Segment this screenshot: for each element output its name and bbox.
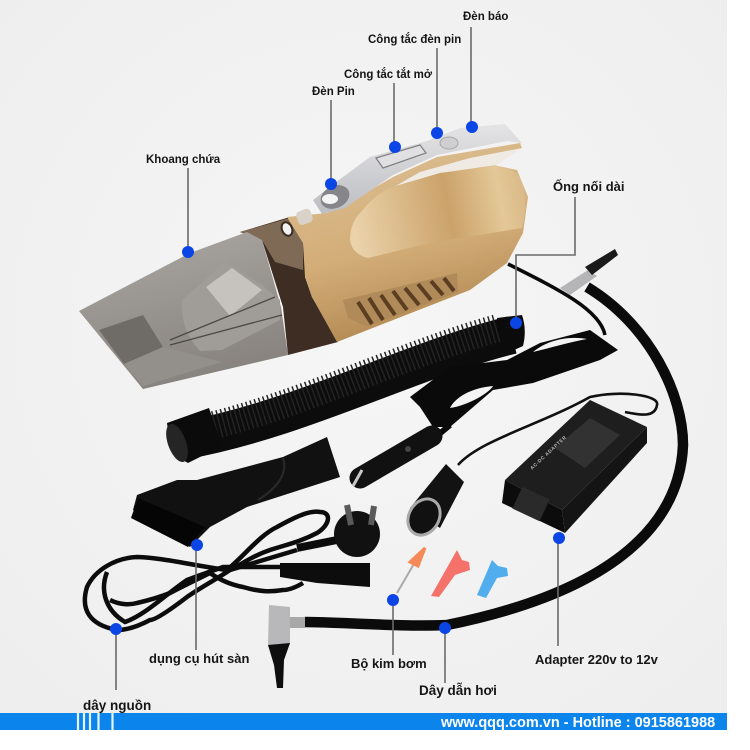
side panel (350, 166, 526, 258)
callout: Công tắc đèn pin (368, 33, 461, 139)
cigarette lighter socket and adapter cable (402, 394, 657, 541)
vacuum cleaner (79, 124, 528, 389)
gold body (287, 143, 528, 342)
callout: dây nguồn (83, 623, 151, 713)
dark brown motor section (240, 217, 338, 355)
lower lever (268, 643, 290, 688)
footer bar (0, 713, 727, 731)
small button (440, 137, 458, 149)
vents (343, 273, 458, 327)
red nozzle (431, 550, 470, 597)
callout: Đèn Pin (312, 86, 355, 190)
transparent canister (79, 232, 288, 389)
callout: Ống nối dài: Ống nối dài (553, 179, 624, 194)
bundled cable (410, 264, 618, 440)
lower logo buttons (295, 208, 314, 226)
IEC connector (280, 563, 370, 587)
callout: Adapter 220v to 12v (535, 532, 659, 667)
orange needle (397, 548, 425, 593)
callout: dụng cụ hút sàn: dụng cụ hút sàn (149, 651, 249, 666)
extension hose (162, 315, 525, 465)
silver handle top (313, 124, 522, 214)
lower chuck (268, 605, 290, 645)
callout: Ống nối dài (510, 179, 624, 329)
callout: Công tắc đèn pin: Công tắc đèn pin (368, 33, 461, 46)
slot in handle (392, 148, 522, 188)
switch (376, 145, 426, 168)
cigarette lighter plug (353, 436, 432, 486)
callout: Công tắc tắt mở (344, 68, 433, 153)
callout: dụng cụ hút sàn (149, 539, 249, 666)
callout: Dây dẫn hơi (419, 622, 497, 698)
filter (182, 262, 280, 351)
power cord (85, 512, 337, 630)
callout: Bộ kim bơm: Bộ kim bơm (351, 656, 427, 671)
AC DC adapter (502, 400, 647, 533)
lower connector (290, 617, 305, 628)
callout: Adapter 220v to 12v: Adapter 220v to 12v (535, 652, 659, 667)
upper lever (585, 249, 618, 275)
callout: Khoang chứa (146, 154, 221, 258)
callout: Đèn Pin: Đèn Pin (312, 86, 355, 98)
callout: Công tắc tắt mở: Công tắc tắt mở (344, 68, 433, 81)
wall plug (334, 505, 380, 557)
blue nozzle (477, 560, 508, 598)
adapter label: AC-DC ADAPTER (529, 435, 568, 471)
crevice brush tool (131, 437, 340, 547)
flashlight button (317, 181, 353, 213)
callout: dây nguồn: dây nguồn (83, 698, 151, 713)
callout: Bộ kim bơm (351, 594, 427, 671)
callout: Dây dẫn hơi: Dây dẫn hơi (419, 683, 497, 698)
callout: Khoang chứa: Khoang chứa (146, 154, 221, 166)
callout: Đèn báo: Đèn báo (463, 11, 508, 23)
upper chuck (560, 270, 597, 295)
footer contact text: www.qqq.com.vn - Hotline : 0915861988 (440, 715, 715, 731)
callout: Đèn báo (463, 11, 508, 133)
air hose (268, 249, 683, 688)
